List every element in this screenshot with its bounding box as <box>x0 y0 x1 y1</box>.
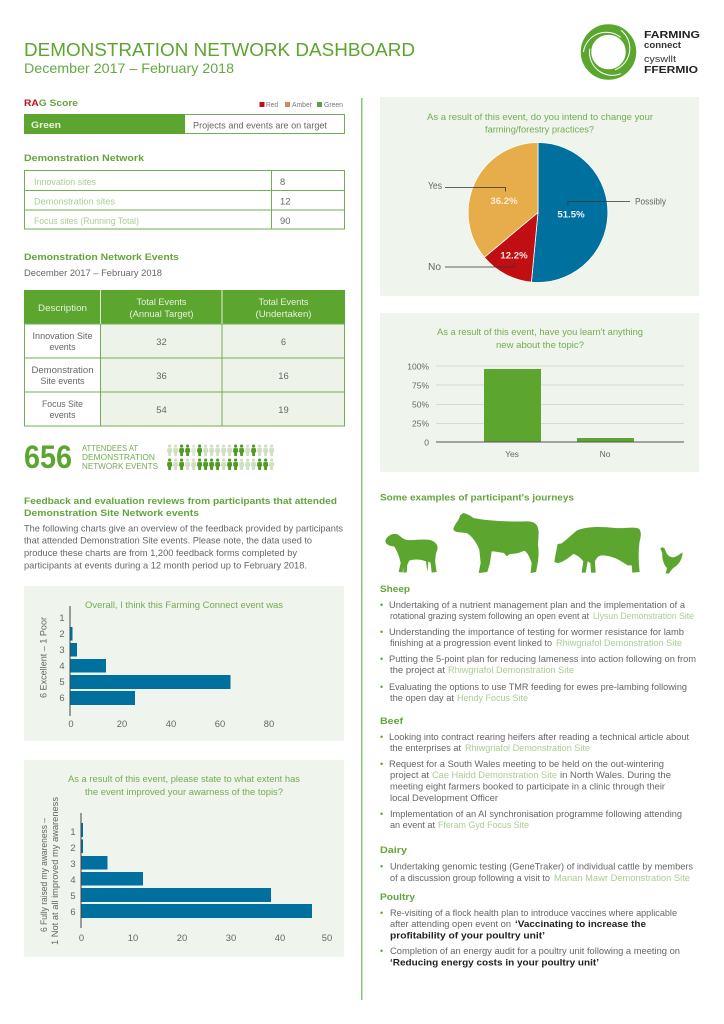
section: sheep: Llysun Demonstration Site <box>593 610 694 621</box>
section: sheep: Putting the 5-point plan for reducing lameness into action following on from <box>389 653 696 664</box>
panel: overall event rating chart: 1 <box>59 612 65 623</box>
panel: awareness chart: 50 <box>322 932 332 943</box>
panel: awareness chart <box>24 760 344 957</box>
column divider <box>361 98 362 1000</box>
section: dairy: Undertaking genomic testing (GeneTraker) of individual cattle by members <box>390 860 693 872</box>
text: feedback intro: participants at events during a 12 month period up to February 2018. <box>24 560 307 570</box>
panel: awareness chart: 40 <box>275 932 285 943</box>
panel: learnt something bar chart: As a result of this event, have you learn't anything <box>437 326 643 337</box>
attendee count: 656 <box>24 439 72 475</box>
title: DEMONSTRATION NETWORK DASHBOARD <box>24 39 415 60</box>
section: poultry: Poultry <box>380 892 416 903</box>
panel: overall event rating chart: 5 <box>59 676 65 687</box>
table: network events: events <box>50 341 76 352</box>
heading: network events: December 2017 – February 2018 <box>24 267 162 278</box>
section: poultry: ‘Reducing energy costs in your poultry unit’ <box>390 956 599 968</box>
panel: awareness chart: 10 <box>128 932 138 943</box>
panel: overall event rating chart: 0 <box>68 718 74 729</box>
panel: overall event rating chart: 6 Excellent – 1 Poor <box>38 617 48 698</box>
panel: awareness chart: 1 <box>70 826 76 837</box>
table: demonstration network: 12 <box>280 196 290 206</box>
section: beef: local Development Officer <box>390 792 498 803</box>
table: network events: Total Events <box>258 296 309 307</box>
panel: change practices pie chart: 36.2% <box>490 196 518 207</box>
section: beef: Request for a South Wales meeting to be held on the out-wintering <box>389 758 664 769</box>
section: beef: meeting eight farmers booked to participate in a clinic through their <box>390 780 665 792</box>
title: December 2017 – February 2018 <box>24 60 234 76</box>
section: sheep: rotational grazing system following an open event at <box>390 610 589 621</box>
section: dairy <box>380 845 693 883</box>
panel: awareness chart: 4 <box>70 874 76 885</box>
panel: awareness chart: 6 <box>70 906 76 917</box>
panel: change practices pie chart: As a result of this event, do you intend to change your <box>427 111 653 122</box>
icon: attendee pictogram <box>167 444 274 470</box>
section: poultry: Re-visiting of a flock health plan to introduce vaccines where applicable <box>390 907 677 918</box>
section: sheep: the project at <box>390 664 445 675</box>
logo: Farming Connect: cyswllt <box>644 54 676 65</box>
RAG legend <box>260 100 343 109</box>
panel: learnt something bar chart: new about the topic? <box>496 339 584 350</box>
panel: learnt something bar chart: No <box>600 449 611 459</box>
panel: learnt something bar chart: 100% <box>407 362 429 372</box>
text: feedback intro: produce these charts are from 1,200 feedback forms completed by <box>24 547 297 558</box>
text: feedback intro: The following charts give an overview of the feedback provided by participants <box>24 522 343 534</box>
section: sheep: Rhiwgriafol Demonstration Site <box>556 637 682 648</box>
section: sheep: the open day at <box>390 692 454 703</box>
section: sheep: • <box>380 682 383 692</box>
panel: overall event rating chart: 6 <box>59 692 65 703</box>
table: network events: Innovation Site <box>32 330 92 341</box>
table: network events: (Annual Target) <box>130 308 194 319</box>
panel: learnt something bar chart: Yes <box>505 449 519 459</box>
logo: Farming Connect: FARMING <box>644 29 700 41</box>
section: beef: • <box>380 732 383 742</box>
icon: beef cow <box>453 513 539 573</box>
logo: Farming Connect: FFERMIO <box>644 64 698 76</box>
section: poultry: Completion of an energy audit for a poultry unit following a meeting on <box>390 945 680 956</box>
table: demonstration network: 8 <box>280 176 285 187</box>
RAG legend: Green <box>324 100 343 109</box>
table: network events: 32 <box>156 336 167 347</box>
table: network events: 19 <box>278 404 289 415</box>
heading: feedback <box>24 496 337 519</box>
icon: livestock silhouettes <box>385 513 683 574</box>
table: network events: 54 <box>156 404 167 415</box>
heading: network events <box>24 252 179 278</box>
section: sheep: Understanding the importance of testing for wormer resistance for lamb <box>389 626 684 637</box>
section: poultry: ‘Vaccinating to increase the <box>515 918 646 929</box>
section: poultry: profitability of your poultry unit’ <box>390 930 545 940</box>
panel: overall event rating chart: 40 <box>166 718 176 729</box>
table: network events <box>24 290 345 426</box>
heading: journeys: Some examples of participant's journeys <box>380 492 574 504</box>
table: network events: 16 <box>278 370 289 381</box>
panel: awareness chart: 1 Not at all improved my awareness <box>49 797 60 945</box>
section: beef: • <box>380 759 383 769</box>
panel: overall event rating chart: 20 <box>117 718 127 729</box>
panel: change practices pie chart: Possibly <box>635 196 666 206</box>
panel: change practices pie chart: farming/forestry practices? <box>485 124 594 134</box>
section: beef: Implementation of an AI synchronisation programme following attending <box>390 808 682 819</box>
panel: learnt something bar chart <box>380 313 699 472</box>
panel: learnt something bar chart: 50% <box>412 400 429 410</box>
panel: overall event rating chart: 80 <box>264 718 274 729</box>
attendee count: NETWORK EVENTS <box>82 462 158 471</box>
section: poultry <box>380 892 680 968</box>
table: network events: Description <box>38 302 87 313</box>
section: beef: Looking into contract rearing heifers after reading a technical article about <box>389 731 689 742</box>
section: sheep: Sheep <box>380 584 410 595</box>
panel: learnt something bar chart: 0 <box>424 438 429 448</box>
attendee count: ATTENDEES AT <box>82 444 138 453</box>
logo: Farming Connect: connect <box>644 40 682 51</box>
text: feedback intro: that attended Demonstration Site events. Please note, the data used to <box>24 534 312 546</box>
icon: sheep <box>385 534 438 573</box>
section: sheep: Evaluating the options to use TMR feeding for ewes pre-lambing following <box>389 681 687 692</box>
section: sheep: finishing at a progression event linked to <box>390 637 552 648</box>
title <box>24 39 415 76</box>
panel: learnt something bar chart: 25% <box>412 418 429 428</box>
table: network events: 36 <box>156 370 167 381</box>
section: sheep: • <box>380 600 383 610</box>
table: demonstration network <box>24 170 345 229</box>
table: network events: events <box>50 409 76 420</box>
section: dairy: Marian Mawr Demonstration Site <box>554 872 690 883</box>
panel: overall event rating chart: 3 <box>59 644 65 655</box>
section: poultry: • <box>380 908 383 918</box>
panel: overall event rating chart: 2 <box>59 628 65 639</box>
panel: awareness chart: the event improved your awarness of the topis? <box>85 786 283 797</box>
section: beef: Beef <box>380 716 404 727</box>
section: beef: an event at <box>390 819 435 830</box>
section: beef: in North Wales. During the <box>560 769 671 780</box>
panel: overall event rating chart: Overall, I think this Farming Connect event was <box>85 599 283 610</box>
table: network events: (Undertaken) <box>256 308 312 319</box>
heading: feedback: Demonstration Site Network events <box>24 508 199 519</box>
text: feedback intro <box>24 522 343 570</box>
panel: change practices pie chart: 12.2% <box>500 250 528 262</box>
panel: change practices pie chart: No <box>428 262 441 273</box>
attendee count <box>24 439 158 475</box>
panel: change practices pie chart: Yes <box>428 181 442 192</box>
table: network events: Focus Site <box>42 398 83 409</box>
RAG status bar: Projects and events are on target <box>193 120 327 130</box>
section: sheep: Hendy Focus Site <box>457 692 528 703</box>
section: beef: Rhiwgriafol Demonstration Site <box>465 742 590 753</box>
panel: change practices pie chart: 51.5% <box>557 210 585 220</box>
table: demonstration network: Innovation sites <box>34 176 96 187</box>
panel: awareness chart: As a result of this event, please state to what extent has <box>68 773 300 784</box>
RAG legend: Amber <box>292 100 312 109</box>
section: beef: Cae Haidd Demonstration Site <box>432 769 557 780</box>
RAG status bar: Green <box>31 120 61 131</box>
panel: awareness chart: 3 <box>70 858 76 869</box>
section: poultry: • <box>380 946 383 956</box>
RAG status bar <box>24 114 344 134</box>
panel: awareness chart: 5 <box>70 890 76 901</box>
icon: hen <box>660 547 683 574</box>
section: beef: project at <box>390 769 429 780</box>
attendee count: DEMONSTRATION <box>82 453 155 462</box>
panel: awareness chart: 30 <box>226 932 236 943</box>
heading: network events: Demonstration Network Events <box>24 252 179 263</box>
logo: Farming Connect <box>579 25 700 81</box>
table: network events: 6 <box>281 336 286 347</box>
section: beef: Fferam Gyd Focus Site <box>438 819 529 830</box>
table: demonstration network: 90 <box>280 215 290 226</box>
section: dairy: Dairy <box>380 845 408 856</box>
section: beef <box>380 716 689 830</box>
table: demonstration network: Focus sites (Running Total) <box>34 215 139 226</box>
table: network events: Demonstration <box>32 364 94 375</box>
table: network events: Site events <box>40 375 85 386</box>
panel: learnt something bar chart: 75% <box>412 380 429 390</box>
icon: dairy cow <box>554 527 641 573</box>
section: dairy: of a discussion group following a visit to <box>390 872 550 883</box>
section: sheep: • <box>380 627 383 637</box>
section: sheep: Rhiwgriafol Demonstration Site <box>448 664 574 675</box>
section: sheep: Undertaking of a nutrient management plan and the implementation of a <box>389 599 686 610</box>
heading: RAG score: RAG Score <box>24 98 78 109</box>
section: dairy: • <box>380 862 383 872</box>
heading: feedback: Feedback and evaluation reviews from participants that attended <box>24 496 337 507</box>
table: network events: Total Events <box>136 296 187 307</box>
panel: awareness chart: 6 Fully raised my awareness – <box>38 817 49 932</box>
table: demonstration network: Demonstration sites <box>34 196 115 206</box>
panel: overall event rating chart: 60 <box>215 718 225 729</box>
panel: awareness chart: 20 <box>177 932 187 943</box>
panel: change practices pie chart <box>380 97 699 296</box>
section: poultry: after attending open event on <box>390 918 511 929</box>
section: beef: • <box>380 809 383 819</box>
section: sheep: • <box>380 654 383 664</box>
panel: overall event rating chart <box>24 586 344 741</box>
section: beef: the enterprises at <box>390 742 461 753</box>
panel: awareness chart: 0 <box>79 932 84 943</box>
pie slices <box>468 142 608 282</box>
heading: demonstration network: Demonstration Network <box>24 153 145 164</box>
RAG legend: Red <box>266 100 278 109</box>
section: sheep <box>380 584 696 703</box>
panel: overall event rating chart: 4 <box>59 660 65 671</box>
panel: awareness chart: 2 <box>70 842 76 853</box>
